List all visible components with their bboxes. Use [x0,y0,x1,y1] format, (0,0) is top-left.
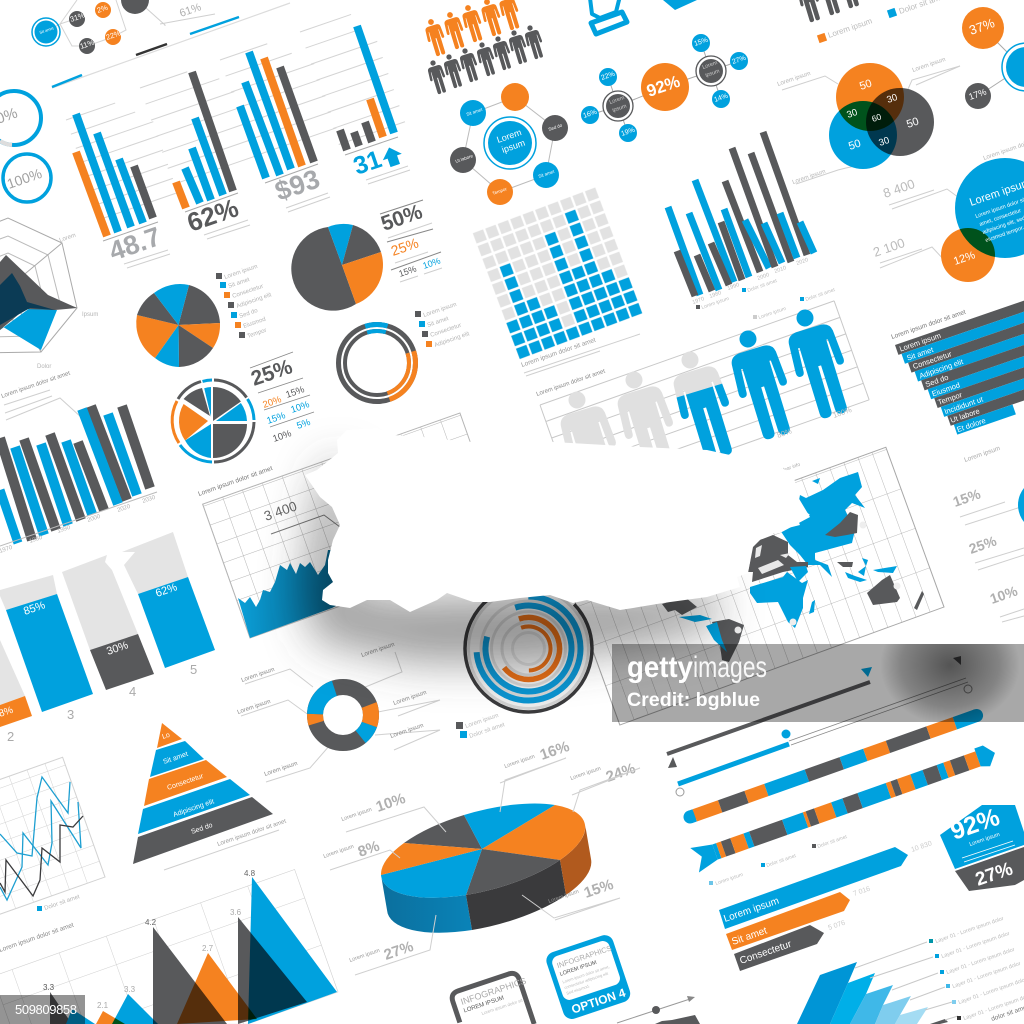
chart: overlapping triangles: 3.3 [124,985,136,994]
chart: line chart: Dolor sit amet [44,894,81,912]
chart: venn diagram: 60 [870,111,883,124]
legend and axis: grouped bars: 2000 [757,272,770,282]
chart: bar chart 48.7 [66,93,178,268]
chart: waffle column chart: Lorem ipsum dolor sit amet [520,337,597,369]
callouts: 3D pie percentages: 24% [604,760,638,786]
icon: top tray shape [590,0,697,34]
legend and axis: grouped bars: 2020 [796,257,809,267]
chart: grouped bars 1970-2010 left: 2020 [117,504,132,514]
card: option 4: OPTION 4 [570,985,628,1017]
text: exploded pie stats: 15% [284,384,306,401]
map: central america [662,597,697,615]
chart: segmented donut with callouts: Lorem ipsum [264,761,298,778]
ring gauge: partial percent [0,91,41,145]
map: europe gaps [755,545,790,574]
callouts: 3D pie percentages: 16% [538,738,572,764]
chart: overlapping triangles: 2.1 [97,1001,109,1010]
chart: venn diagram: Lorem ipsum [777,71,811,88]
chart: progress columns: 3 [67,707,74,722]
network: 92% cluster: 92% [644,72,682,101]
list: layer legend and blue fan: Layer 01 - Lorem ipsum dolor [952,961,1022,990]
chart: grouped bars with dark and blue [668,132,814,296]
chart: horizontal bars list: Tempor [937,390,964,407]
card: option 4: INFOGRAPHICS [556,944,613,970]
chart: radar: Ipsum [82,312,98,318]
text: exploded pie stats: 10% [271,428,293,445]
chart: horizontal bars list: Ut labore [949,406,981,425]
chart: world map [562,447,944,725]
map: australia [867,575,900,605]
chart: grouped bars 1970-2010 left: 2000 [87,514,102,524]
list: layer legend and blue fan: Layer 01 - Lorem ipsum dolor [941,931,1011,960]
legend: ring donut: Adipiscing elit [434,331,471,349]
text: exploded pie stats [248,352,314,445]
chart: bar chart 62%: 62% [183,192,242,238]
text: exploded pie stats: 20% [261,394,283,411]
callouts: 3D pie percentages: Lorem ipsum [341,807,373,823]
legend: ribbon bars: Dolor sit amet [817,834,848,850]
chart: radar [0,218,98,370]
legend: pie slices: Consectetur [232,284,264,300]
card: infographics dark: INFOGRAPHICS [459,976,527,1007]
chart: grouped bars 1970-2010 left: 1990 [57,525,72,535]
chart: segmented donut with callouts: Dolor sit amet [469,722,506,740]
chart: people percent [536,288,870,455]
chart: horizontal bars list: Consectetur [912,349,953,371]
card: option 4: consectetur adipiscing elit [564,971,610,990]
network: 92% cluster: ipsum [612,103,628,114]
network: 92% cluster: ipsum [705,68,721,79]
bubble: lorem ipsum with 12% overlap: 2 100 [871,235,907,260]
chart: venn diagram: Lorem ipsum [792,169,826,186]
chart: exploded pie with ring [172,380,254,462]
chart: pyramid [133,723,287,870]
card: option 4: LOREM IPSUM [559,960,598,978]
legend: ring donut: Sit amet [427,316,450,329]
list: layer legend and blue fan: Layer 01 - Lorem ipsum dolor [946,947,1016,976]
bubbles: 37% and 17% hub: 37% [967,15,997,38]
chart: venn diagram: 50 [858,78,874,93]
badge: 92% and 27% [940,803,1024,891]
network: hub and spokes: Sit amet [538,169,556,179]
map: arctic island [812,478,820,484]
legend: ribbon bars [709,834,848,887]
network: 92% cluster: Lorem [702,60,719,71]
bar: striped ribbon arrow [690,742,1000,873]
network: 92% cluster [581,34,748,142]
people: orange row [422,0,523,58]
chart: overlapping triangles: 3.3 [43,983,55,992]
panel: top-left network diagram: 61% [178,1,203,20]
watermark: image id: 509809858 [15,1002,77,1017]
card: infographics dark [450,969,540,1024]
network: hub and spokes: Tempor [492,186,508,196]
card: option 4 [544,933,633,1021]
chart: pie 50% [291,224,383,311]
people: dark row [425,23,547,96]
legend: ribbon bars: Lorem ipsum [715,872,744,887]
chart: pyramid: Sed do [190,822,214,836]
chart: radar: Dolor [37,364,51,370]
watermark band: getty images: getty [627,651,693,684]
text: pie 50% stats: 25% [389,235,420,259]
callouts: 3D pie percentages: Lorem ipsum [323,844,355,860]
chart: horizontal bars list: Sit amet [906,345,935,363]
bubble: lorem ipsum with 12% overlap [871,140,1024,282]
map: africa [750,572,808,628]
chart: arrow bars: 10 830 [910,840,933,854]
people: top-right with legend [794,0,948,43]
chart: arrow bars: Consectetur [738,939,794,967]
chart: bar chart $93: $93 [271,164,324,207]
chart: overlapping triangles: 3.6 [230,908,242,917]
map: europe [748,535,808,582]
chart: arrow bars: 5 076 [827,920,846,932]
legend: pie slices: Adipiscing elit [236,292,273,310]
chart: arrow bars [719,840,933,971]
chart: overlapping triangles: 2.7 [202,944,214,953]
watermark band: getty images: images [693,651,767,684]
map: russia east [825,512,858,537]
chart: progress columns: 4 [129,684,136,699]
card: option 4: Lorem ipsum dolor sit amet, [562,964,610,984]
chart: progress columns: 85% [22,599,47,618]
chart: segmented donut with callouts: Lorem ipsum [241,667,275,684]
chart: progress columns: 5 [190,662,197,677]
stats: right-edge percentages: 10% [988,582,1020,607]
chart: venn diagram [777,57,960,186]
bubble: lorem ipsum with 12% overlap: 12% [952,249,977,268]
legend and axis: grouped bars: Lorem ipsum [701,296,730,311]
panel: top-left network diagram [32,0,215,54]
callouts: 3D pie percentages: 10% [374,790,408,816]
legend: pie slices: Sed do [239,308,259,320]
legend: pie slices: Tempor [247,328,268,340]
timeline: top-left segments [52,3,290,88]
chart: bar chart 31 up: 31 [350,145,385,181]
text: exploded pie stats: 5% [295,417,312,432]
legend: pie slices [216,264,273,340]
chart: overlapping triangles: 4.8 [244,869,256,878]
chart: segmented donut with callouts: Lorem ipsum [390,723,424,740]
map: indochina [837,562,853,567]
bubble: lorem ipsum with 12% overlap: 8 400 [881,176,917,201]
watermark band: getty images: Credit: bgblue [627,690,760,711]
map: south america [712,619,744,662]
card: infographics dark: LOREM IPSUM [463,995,505,1014]
legend and axis: grouped bars: 1980 [709,290,722,300]
slider: dark and blue timeline [667,656,972,796]
stats: right-edge percentages [951,445,1024,622]
chart: horizontal bars list: Eiusmod [931,380,961,398]
legend: pie slices: Sit amet [228,277,251,290]
text: pie 50% stats [378,200,442,282]
chart: segmented donut with callouts: Lorem ipsum [237,699,271,716]
legend: ring donut: Consectetur [430,323,462,339]
legend and axis: grouped bars: 1990 [727,282,740,292]
chart: progress columns: 2 [7,729,14,744]
chart: overlapping triangles [0,869,338,1024]
map: eurasia [780,472,865,577]
callouts: 3D pie percentages: 27% [382,938,416,964]
chart: horizontal bars list [890,273,1024,444]
network: hub and spokes: Ut labore [455,153,474,164]
callouts: 3D pie percentages [323,738,640,975]
chart: arrow bars: Lorem ipsum [722,896,781,925]
chart: concentric rings [465,585,592,712]
text: pie 50% stats: 15% [397,264,418,279]
legend and axis: grouped bars: 2010 [774,265,787,275]
panel: top-left network diagram: 22% [105,28,122,42]
chart: venn diagram: 30 [877,135,891,149]
legend: ring donut [415,302,471,349]
network: hub and spokes: Lorem [495,127,523,145]
legend: pie slices: Lorem ipsum [224,264,258,281]
chart: people percent: Lorem ipsum dolor sit amet [536,369,606,398]
bubbles: 37% and 17% hub [962,7,1024,109]
network: 92% cluster: 22% [600,71,616,82]
torn white blob [305,428,810,612]
network: hub and spokes [450,83,568,205]
chart: grouped bars 1970-2010 left: Lorem ipsum dolor sit amet [1,371,71,400]
chart: segmented donut with callouts: Lorem ipsum [393,690,427,707]
network: 92% cluster: 15% [693,37,709,48]
panel: top-left network diagram: 2% [96,3,109,15]
chart: venn diagram: 30 [845,107,859,121]
ring gauge: 100%: 100% [5,165,44,192]
chart: bar chart 48.7: 48.7 [105,221,165,267]
chart: venn diagram: 50 [847,138,863,153]
bar: rounded striped bar [682,707,985,825]
stats: right-edge percentages: Lorem ipsum [963,445,1001,464]
chart: segmented donut with callouts: Lorem ipsum [465,713,499,730]
chart: horizontal bars list: Lorem ipsum dolor sit amet [890,309,967,341]
chart: overlapping triangles: Lorem ipsum dolor sit amet [0,922,75,954]
chart: area chart 3 400: Lorem ipsum dolor sit amet [197,465,274,498]
callouts: 3D pie percentages: Lorem ipsum [570,766,602,782]
legend: ring donut: Lorem ipsum [423,302,457,319]
chart: double ring donut [338,324,416,402]
card: option 4: Sed eiusmod. [566,983,590,996]
chart: arrow bars: Sit amet [730,925,769,948]
chart: segmented donut with callouts [237,642,506,782]
card: infographics dark: Lorem ipsum dolor sit [481,997,524,1016]
stats: right-edge percentages: 25% [967,532,999,557]
map: madagascar [809,600,815,614]
chart: line chart [0,757,105,934]
panel: top-left network diagram: 11% [79,38,96,51]
panel: top-left network diagram: Sit amet [39,25,55,35]
map: pins [734,522,900,634]
chart: area chart 3 400 [197,413,507,638]
callouts: 3D pie percentages: Lorem ipsum [349,948,381,964]
badge: 92% and 27%: 27% [973,858,1016,891]
chart: segmented donut with callouts: Lorem ipsum [361,642,395,659]
callouts: 3D pie percentages: Lorem ipsum [548,889,580,905]
panel: top-left network diagram: 31% [69,10,86,24]
chart: people percent: Lorem ipsum [758,306,787,321]
chart: horizontal bars list: Adipiscing elit [918,357,965,380]
legend: pie slices: Eiusmod [243,317,267,330]
chart: pyramid: Lo [161,732,171,741]
chart: horizontal bars list: Incididunt ut [943,394,985,416]
chart: horizontal bars list: Lorem ipsum [898,331,942,353]
chart: world map: Year info [781,462,801,474]
chart: grouped bars 1970-2010 left: 2030 [142,495,157,505]
list: layer legend and blue fan: Layer 01 - Lorem ipsum dolor [935,916,1005,945]
chart: bar chart 31 up [300,9,410,184]
chart: arrow bars: 7 016 [852,886,871,898]
map: arabia [790,566,808,582]
badge: 92% and 27%: 92% [947,803,1003,846]
text: exploded pie stats: 10% [289,399,311,416]
chart: pyramid: Adipiscing elit [172,798,215,819]
chart: pyramid: Lorem ipsum dolor sit amet [217,819,287,848]
text: exploded pie stats: 15% [265,410,287,427]
bubble: lorem ipsum with 12% overlap: eiusmod tempor. [985,225,1024,244]
callouts: 3D pie percentages: 8% [356,838,382,861]
network: hub and spokes: ipsum [500,138,526,155]
text: pie 50% stats: 50% [378,200,426,236]
chart: horizontal bars list: Sed do [924,373,950,389]
chart: pyramid: Consectetur [166,773,205,792]
legend and axis: grouped bars: 1970 [692,296,705,306]
network: 92% cluster: Lorem [609,95,626,106]
chart: area chart 3 400: 3 400 [262,498,299,524]
map: new zealand [914,591,924,610]
legend and axis: grouped bars: Dolor sit amet [747,278,778,294]
network: hub and spokes: Sit amet [466,107,484,117]
chart: venn diagram: 30 [885,92,899,106]
network: 92% cluster: 19% [620,127,636,138]
list: layer legend and blue fan [797,916,1024,1024]
watermark band: getty images [612,644,1024,722]
shadow: torn paper shadow [305,458,720,662]
chart: grouped bars 1970-2010 left: 1980 [29,535,44,545]
watermark: image id [0,995,85,1024]
legend and axis: grouped bars [692,257,809,311]
chart: overlapping triangles: 4.2 [145,918,157,927]
chart: people percent: Dolor sit amet [805,287,836,303]
callouts: 3D pie percentages: Lorem ipsum [504,754,536,770]
callouts: 3D pie percentages: 15% [582,876,616,902]
chart: progress columns: 62% [154,581,179,600]
network: hub and spokes: Sed do [548,122,563,132]
chart: bar chart $93 [220,31,336,212]
chart: radar: Lorem [59,233,77,244]
chart: bar chart 62% [140,59,258,239]
chart: people percent: 100% [832,405,853,420]
text: pie 50% stats: 10% [421,256,442,271]
chart: pie with seven slices [136,284,220,367]
bubbles: 37% and 17% hub: 17% [967,87,988,102]
chart: people percent: 80% [776,426,793,440]
chart: waffle column chart [471,186,644,376]
map: south-east asia [845,558,897,582]
chart: grouped bars 1970-2010 left [0,371,157,555]
chart: pyramid: Sit amet [162,751,189,766]
chart: venn diagram: Lorem ipsum [912,57,946,74]
chart: venn diagram: 50 [905,116,921,131]
chart: horizontal bars list: Et dolore [956,416,987,434]
bubble: lorem ipsum with 12% overlap: amet, consectetur [979,208,1022,228]
text: exploded pie stats: 25% [248,355,296,391]
people: top-right with legend: Lorem ipsum [827,16,874,40]
chart: 3D pie [381,804,591,933]
stats: right-edge percentages: 15% [951,485,983,510]
network: 92% cluster: 16% [582,109,598,120]
legend: ribbon bars: Dolor sit amet [766,853,797,869]
chart: progress columns: 30% [105,639,130,658]
arrow: bottom timeline [617,996,700,1024]
network: 92% cluster: 27% [731,55,747,66]
ring gauge: 100% [3,154,51,202]
badge: 92% and 27%: Lorem ipsum [969,832,1001,848]
chart: progress columns [0,532,215,744]
network: 92% cluster: 14% [713,93,729,104]
